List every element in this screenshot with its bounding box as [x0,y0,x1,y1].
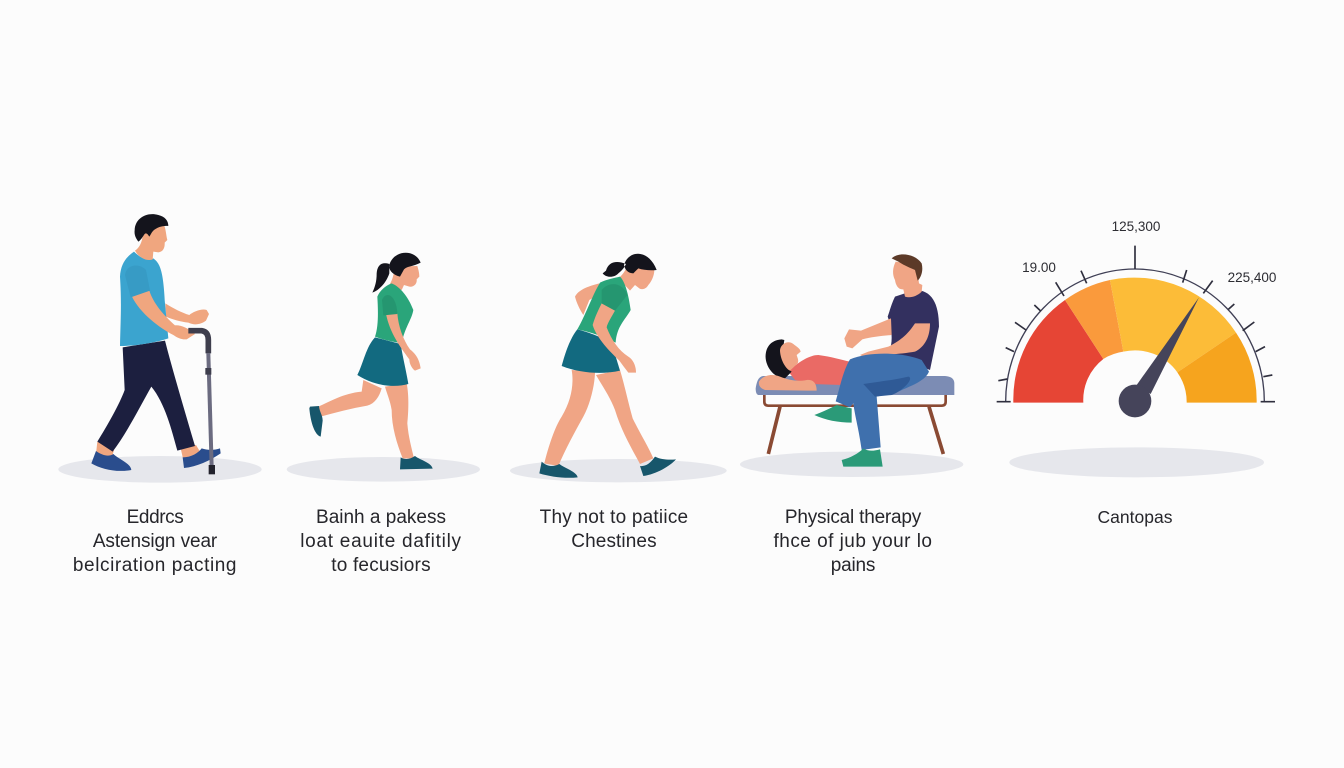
gauge segment: red [1013,300,1103,403]
front shoe [400,456,433,469]
patient hair [766,339,792,378]
figure: woman jogging [287,253,480,482]
front leg [385,383,414,458]
ground shadow [1009,447,1264,477]
sleeve [382,295,397,315]
gauge label: left: 19.00 [1022,260,1056,275]
ankles [96,442,200,460]
neck and face [135,223,167,260]
therapist shoes [814,405,883,467]
caption: step 4: fhce of jub your lo [774,531,932,552]
rear leg [318,380,382,417]
caption: step 3: Thy not to patiice [540,507,688,528]
therapist jeans [836,354,929,450]
arm [386,313,421,371]
sleeve [602,284,627,311]
patient arm [759,375,817,391]
shirt [577,277,631,343]
caption: step 1: Eddrcs [127,507,183,528]
gauge label: top: 125,300 [1112,219,1160,234]
hair [135,214,168,242]
ground shadow [740,452,963,477]
skirt [562,329,620,373]
hair [603,254,657,277]
therapist neck and face [893,262,922,297]
arm behind back [575,283,599,315]
front leg [596,370,653,464]
caption: step 2: Bainh a pakess [316,507,446,528]
figure: pain gauge [997,246,1275,477]
caption: step 5: Cantopas [1098,507,1173,527]
gauge segment: yellow [1110,278,1236,372]
near arm [132,291,195,339]
therapist hair [892,254,922,281]
gauge needle [1137,297,1199,394]
shirt [120,252,168,346]
caption: step 2: to fecusiors [331,555,431,576]
figure: physical therapist with patient on table [740,254,963,477]
ground shadow [58,456,262,483]
treatment table [756,376,954,454]
figure: woman bent over holding her back [510,254,727,482]
cane [188,331,215,474]
front arm [593,303,636,373]
gauge segment: orange [1065,280,1123,359]
trousers [97,341,195,452]
gauge hub [1119,385,1151,417]
gauge segment: amber [1177,333,1257,403]
therapist arms [844,318,930,357]
far arm [165,303,209,324]
caption: step 2: loat eauite dafitily [300,531,462,552]
jeans shadow [863,377,910,397]
gauge label: right: 225,400 [1228,270,1276,285]
gauge outer arc [1006,269,1264,402]
ground shadow [510,459,727,482]
patient body [788,355,850,385]
patient head and neck [780,342,801,371]
caption: step 4: Physical therapy [785,507,922,528]
therapist shirt [888,290,939,370]
shirt [375,283,413,343]
neck and face [389,266,419,290]
shoes [91,448,221,471]
sleeve [125,265,150,297]
caption: step 1: belciration pacting [73,555,237,576]
gauge ticks [997,246,1275,402]
caption: step 3: Chestines [571,531,657,552]
caption: step 4: pains [831,555,875,576]
rear shoe [309,406,323,437]
rear leg [544,370,595,466]
ground shadow [287,457,480,482]
neck and face [618,263,654,291]
figure: man walking with cane [58,214,262,483]
shoes [539,457,676,478]
skirt [357,337,408,386]
hair [372,253,421,293]
caption: step 1: Astensign vear [93,531,218,552]
